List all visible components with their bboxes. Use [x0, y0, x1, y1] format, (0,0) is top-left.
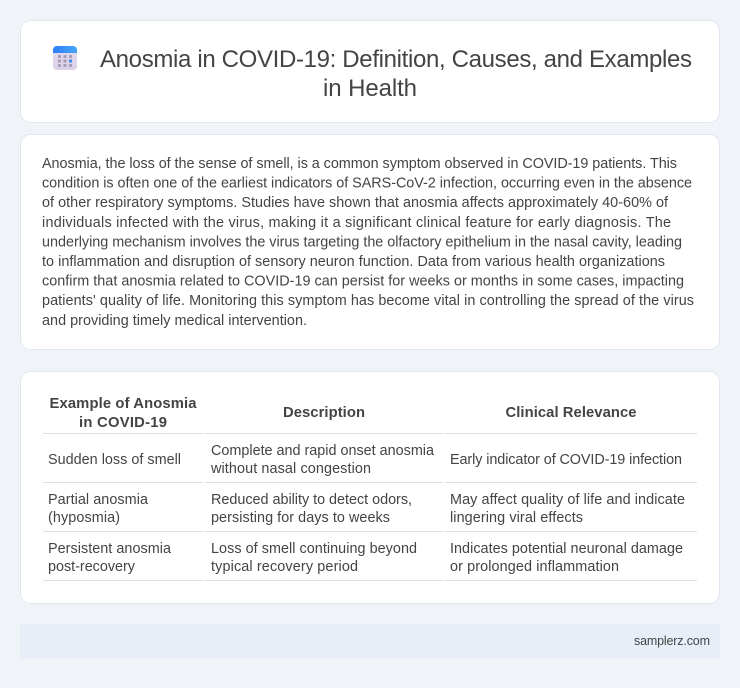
table row: partial anosmia: May affect quality of life and indicate [450, 492, 685, 508]
footer: samplerz.com [634, 634, 710, 648]
table row: partial anosmia [48, 492, 685, 526]
text block: anosmia overview: of other respiratory symptoms. Studies have shown that anosmia affects approximately 40-60% of [42, 195, 669, 211]
table header [50, 396, 636, 431]
table row: persistent anosmia: post-recovery [48, 559, 136, 575]
text block: anosmia overview [42, 156, 694, 329]
table row: partial anosmia: lingering viral effects [450, 510, 583, 526]
title: Anosmia in COVID-19: Definition, Causes, and Examples [100, 46, 692, 73]
footer [20, 624, 720, 658]
table header: Description [283, 405, 365, 421]
text block: anosmia overview: condition is often one of the earliest indicators of SARS-CoV-2 infection, occurring even in the absence [42, 176, 692, 192]
text block: anosmia overview: to inflammation and disruption of sensory neuron function. Data from various health organizations [42, 254, 665, 270]
panel: intro paragraph [20, 134, 720, 350]
text block: anosmia overview: and providing timely medical intervention. [42, 313, 307, 329]
table row: partial anosmia: Partial anosmia [48, 492, 148, 508]
icon: calendar [53, 46, 77, 70]
table row: sudden loss of smell: without nasal congestion [210, 461, 371, 477]
panel: examples table [20, 372, 720, 604]
table header: in COVID-19 [79, 415, 167, 431]
panel: title card [20, 20, 720, 122]
text block: anosmia overview: Anosmia, the loss of the sense of smell, is a common symptom observed in COVID-19 patients. This [42, 156, 677, 172]
table row: sudden loss of smell: Complete and rapid onset anosmia [211, 443, 434, 459]
text block: anosmia overview: patients' quality of life. Monitoring this symptom has become vital in controlling the spread of the virus [42, 293, 694, 309]
table row: persistent anosmia: Indicates potential neuronal damage [450, 541, 683, 557]
table row: sudden loss of smell [48, 443, 682, 477]
table header: Example of Anosmia [50, 396, 197, 412]
text block: anosmia overview: underlying mechanism involves the virus targeting the olfactory epithelium in the nasal cavity, leading [42, 234, 682, 250]
table header: Clinical Relevance [506, 405, 636, 421]
table row: partial anosmia: Reduced ability to detect odors, [211, 492, 412, 508]
title [100, 46, 692, 102]
table row: persistent anosmia: Loss of smell continuing beyond [211, 541, 417, 557]
table row: partial anosmia: persisting for days to weeks [211, 510, 390, 526]
table row: persistent anosmia [48, 541, 683, 575]
text block: anosmia overview: confirm that anosmia related to COVID-19 can persist for weeks or months in some cases, impacting [42, 274, 684, 290]
table row: partial anosmia: (hyposmia) [48, 510, 120, 526]
table row: persistent anosmia: typical recovery period [211, 559, 358, 575]
table row: persistent anosmia: Persistent anosmia [48, 541, 171, 557]
table row: persistent anosmia: or prolonged inflammation [450, 559, 619, 575]
table row: sudden loss of smell: Sudden loss of smell [48, 452, 181, 468]
title: in Health [323, 75, 417, 102]
text block: anosmia overview: individuals infected with the virus, making it a significant clinical feature for early diagnosis. The [42, 215, 671, 231]
table row: sudden loss of smell: Early indicator of COVID-19 infection [450, 452, 682, 468]
